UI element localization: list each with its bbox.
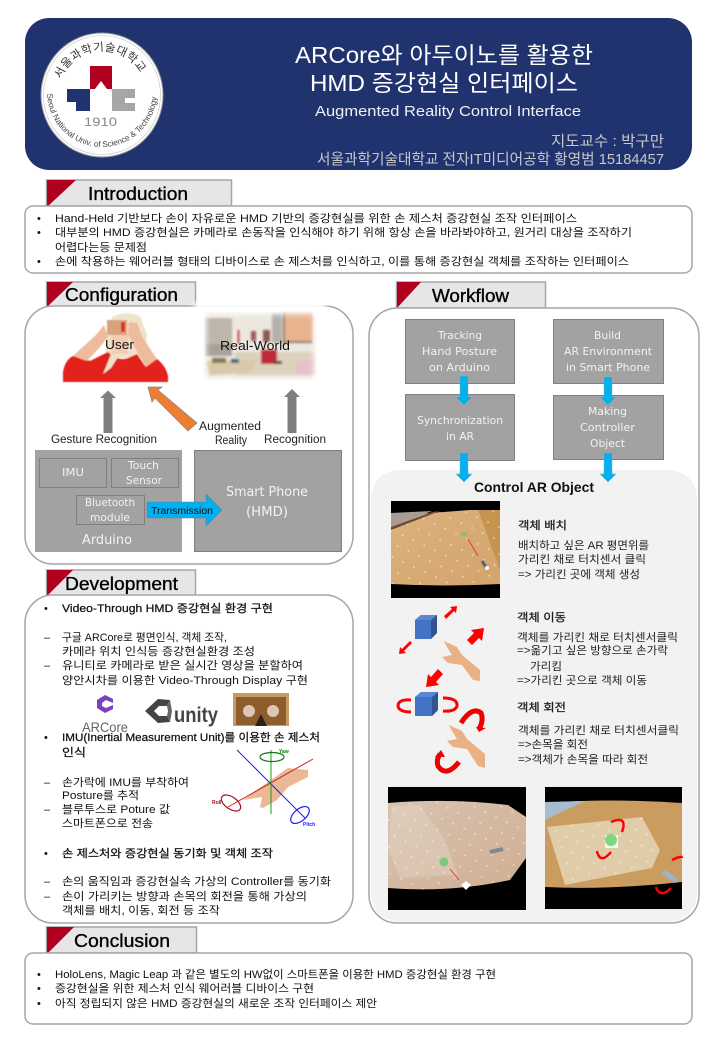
box: IMU: IMU	[62, 466, 84, 479]
box: Build AR Environment: in Smart Phone	[566, 361, 650, 374]
university logo: Seoul National Univ. of Science & Technology	[47, 94, 158, 147]
text: synchronization: 손이 가리키는 방향과 손목의 회전을 통해 가상의	[62, 889, 307, 903]
photo: place object	[391, 501, 500, 598]
label: Real-World: Real-World	[220, 338, 290, 353]
text: move object: =>가리킨 곳으로 객체 이동	[517, 674, 647, 687]
text: video-through: –	[44, 632, 51, 644]
panel: introduction text: •	[37, 227, 41, 239]
label: Gesture Recognition: Gesture Recognition	[51, 434, 157, 446]
box: Arduino	[35, 450, 182, 552]
university logo: 1910	[84, 115, 117, 129]
university logo: 서울과학기술대학교	[54, 41, 146, 78]
text: IMU: –	[44, 777, 51, 789]
icon: rotate cube and hand	[398, 692, 486, 771]
arrow: augmented reality	[148, 387, 197, 431]
text: move object: 가리킴	[530, 660, 562, 673]
image: cardboard headset	[233, 693, 289, 726]
text: place object	[518, 519, 649, 581]
text: rotate object: =>손목을 회전	[518, 738, 588, 751]
panel: introduction text: 어렵다는등 문제점	[55, 241, 147, 254]
box: Arduino: Arduino	[82, 533, 132, 548]
panel: control AR object	[371, 470, 697, 922]
box: Tracking Hand Posture	[406, 320, 514, 384]
section: Development	[25, 570, 353, 923]
text: video-through: •	[44, 603, 48, 615]
panel: workflow	[369, 308, 699, 923]
text: video-through: 유니티로 카메라로 받은 실시간 영상을 분할하여	[62, 658, 303, 672]
box: Touch Sensor: Sensor	[126, 474, 162, 487]
text: video-through	[44, 602, 308, 687]
text: IMU: 블루투스로 Poture 값	[62, 803, 170, 816]
box: Making Controller Object	[554, 396, 664, 460]
box: Smart Phone (HMD): (HMD)	[246, 505, 288, 520]
logo: ARCore	[82, 695, 128, 735]
text: move object: =>옮기고 싶은 방향으로 손가락	[517, 644, 668, 657]
panel: conclusion text	[25, 953, 692, 1024]
panel: development	[25, 595, 353, 923]
text: synchronization: 객체를 배치, 이동, 회전 등 조작	[62, 904, 220, 917]
photo: AR plane rotate	[545, 787, 682, 909]
box: Build AR Environment	[554, 320, 664, 384]
photo: user with headset	[63, 313, 168, 382]
panel: configuration	[25, 306, 353, 564]
panel: conclusion text: •	[37, 998, 41, 1010]
photo: AR plane move	[388, 787, 526, 910]
box: Synchronization in AR: Synchronization	[417, 414, 503, 427]
panel: introduction text: •	[37, 213, 41, 225]
photo: real world room	[200, 308, 320, 384]
text: video-through: 구글 ARCore로 평면인식, 객체 조작,	[62, 631, 227, 644]
diagram: hand yaw pitch roll: Roll	[212, 800, 222, 806]
title: HMD 증강현실 인터페이스	[310, 70, 578, 96]
heading: Conclusion: Conclusion	[74, 931, 170, 951]
label: Augmented Reality: Augmented	[199, 421, 261, 433]
box: Tracking Hand Posture: Tracking	[437, 329, 482, 342]
box: Making Controller Object: Controller	[580, 421, 635, 434]
heading: Control AR Object: Control AR Object	[474, 479, 594, 495]
text: place object: 가리킨 채로 터치센서 클릭	[518, 553, 646, 566]
label: Augmented Reality: Reality	[215, 435, 247, 447]
box: Build AR Environment: Build	[594, 329, 621, 342]
text: synchronization: •	[44, 848, 48, 860]
diagram: hand yaw pitch roll: Pitch	[303, 822, 315, 828]
text: rotate object: 객체를 가리킨 채로 터치센서클릭	[518, 724, 679, 737]
text: IMU: •	[44, 732, 48, 744]
logo: unity	[145, 699, 218, 727]
panel: introduction text: 대부분의 HMD 증강현실은 카메라로 손동작을 인식해야 하기 위해 항상 손을 바라봐야하고, 원거리 대상을 조작하기	[55, 225, 632, 239]
author info: 서울과학기술대학교 전자IT미디어공학 황영범 15184457	[317, 151, 664, 168]
box: Bluetooth module: module	[90, 511, 130, 524]
box: Tracking Hand Posture: on Arduino	[429, 361, 490, 374]
diagram: hand yaw pitch roll	[212, 749, 315, 828]
text: move object: 객체를 가리킨 채로 터치센서클릭	[517, 631, 678, 644]
heading: Configuration: Configuration	[65, 285, 178, 305]
author info	[317, 133, 664, 168]
box: Making Controller Object: Making	[588, 405, 627, 418]
icon: move cube and hand	[399, 606, 484, 687]
text: video-through: –	[44, 660, 51, 672]
university logo	[40, 32, 164, 158]
heading: Workflow: Workflow	[432, 286, 510, 306]
text: rotate object: =>객체가 손목을 따라 회전	[518, 753, 648, 766]
text: IMU: 인식	[62, 746, 86, 759]
heading: Conclusion	[46, 927, 196, 954]
text: place object: 배치하고 싶은 AR 평면위를	[518, 538, 649, 552]
box: Synchronization in AR	[406, 394, 514, 460]
author info: 지도교수 : 박구만	[551, 133, 664, 150]
box: Touch Sensor	[112, 458, 178, 488]
text: rotate object: 객체 회전	[517, 701, 566, 714]
title	[295, 42, 593, 96]
text: video-through: Video-Through HMD 증강현실 환경 구현	[62, 602, 273, 615]
text: IMU: Posture를 추적	[62, 789, 139, 802]
text: IMU: IMU(Inertial Measurement Unit)를 이용한 손 제스처	[62, 731, 320, 744]
box: Smart Phone (HMD): Smart Phone	[226, 485, 308, 500]
panel: conclusion text: HoloLens, Magic Leap 과 같은 별도의 HW없이 스마트폰을 이용한 HMD 증강현실 환경 구현	[55, 968, 496, 981]
box: Synchronization in AR: in AR	[446, 430, 474, 443]
arrow: making to control	[600, 453, 616, 482]
header banner	[25, 18, 692, 170]
box: IMU	[40, 458, 106, 488]
logo: unity: unity	[174, 704, 218, 727]
panel: introduction text: Hand-Held 기반보다 손이 자유로운 HMD 기반의 증강현실를 위한 손 제스처 증강현실 조작 인터페이스	[55, 212, 577, 225]
box: Making Controller Object: Object	[590, 437, 626, 450]
panel: introduction text: 손에 착용하는 웨어러블 형태의 디바이스로 손 제스처를 인식하고, 이를 통해 증강현실 객체를 조작하는 인터페이스	[55, 254, 629, 268]
text: IMU: 손가락에 IMU를 부착하여	[62, 775, 189, 789]
diagram: hand yaw pitch roll: Yaw	[279, 749, 289, 755]
text: rotate object	[517, 701, 679, 766]
panel: conclusion text: •	[37, 969, 41, 981]
text: move object: 객체 이동	[517, 611, 566, 624]
label: Augmented Reality	[199, 421, 261, 447]
text: place object: 객체 배치	[518, 519, 567, 532]
box: Build AR Environment: AR Environment	[564, 345, 653, 358]
panel: conclusion text: •	[37, 983, 41, 995]
arrow: tracking to synchronization	[456, 376, 472, 405]
panel: conclusion text: 증강현실을 위한 제스처 인식 웨어러블 디바이스 구현	[55, 982, 314, 995]
section: Conclusion	[25, 927, 692, 1024]
arrow: Transmission: Transmission	[151, 505, 213, 517]
text: synchronization: 손 제스처와 증강현실 동기화 및 객체 조작	[62, 847, 273, 860]
box: Bluetooth module: Bluetooth	[85, 496, 135, 509]
heading: Workflow	[396, 282, 546, 308]
logo: ARCore: ARCore	[82, 719, 128, 735]
panel: introduction text	[25, 206, 692, 273]
arrow: gesture up	[100, 390, 116, 433]
text: IMU: 스마트폰으로 전송	[62, 817, 153, 830]
section: Introduction	[25, 180, 692, 273]
text: synchronization: –	[44, 891, 51, 903]
panel: introduction text: •	[37, 256, 41, 268]
heading: Development: Development	[65, 574, 178, 594]
box: Touch Sensor: Touch	[127, 459, 159, 472]
box: Bluetooth module	[76, 496, 144, 524]
text: synchronization	[44, 847, 331, 917]
title: ARCore와 아두이노를 활용한	[295, 42, 593, 68]
arrow: build to making	[600, 377, 616, 405]
box: Tracking Hand Posture: Hand Posture	[422, 345, 497, 358]
arrow: recognition up	[284, 389, 300, 433]
subtitle: Augmented Reality Control Interface	[315, 103, 581, 120]
text: place object: => 가리킨 곳에 객체 생성	[518, 568, 640, 581]
text: IMU	[44, 731, 320, 830]
label: User: User	[105, 337, 135, 352]
text: video-through: 양안시차를 이용한 Video-Through Display 구현	[62, 674, 308, 687]
text: move object	[517, 611, 678, 687]
heading: Development	[46, 570, 196, 596]
label: Recognition: Recognition	[264, 434, 326, 446]
panel: conclusion text: 아직 정립되지 않은 HMD 증강현실의 새로운 조작 인터페이스 제안	[55, 997, 377, 1010]
arrow: synchronization to control	[456, 453, 472, 482]
section: Workflow	[369, 282, 699, 923]
text: synchronization: 손의 움직임과 증강현실속 가상의 Controller를 동기화	[62, 875, 331, 888]
heading: Configuration	[46, 282, 196, 307]
arrow: Transmission	[147, 494, 222, 526]
text: IMU: –	[44, 804, 51, 816]
section: Configuration	[25, 282, 353, 564]
box: Smart Phone (HMD)	[194, 450, 342, 552]
heading: Introduction	[46, 180, 232, 207]
text: synchronization: –	[44, 876, 51, 888]
text: video-through: 카메라 위치 인식등 증강현실환경 조성	[62, 645, 255, 658]
heading: Introduction: Introduction	[88, 184, 188, 204]
